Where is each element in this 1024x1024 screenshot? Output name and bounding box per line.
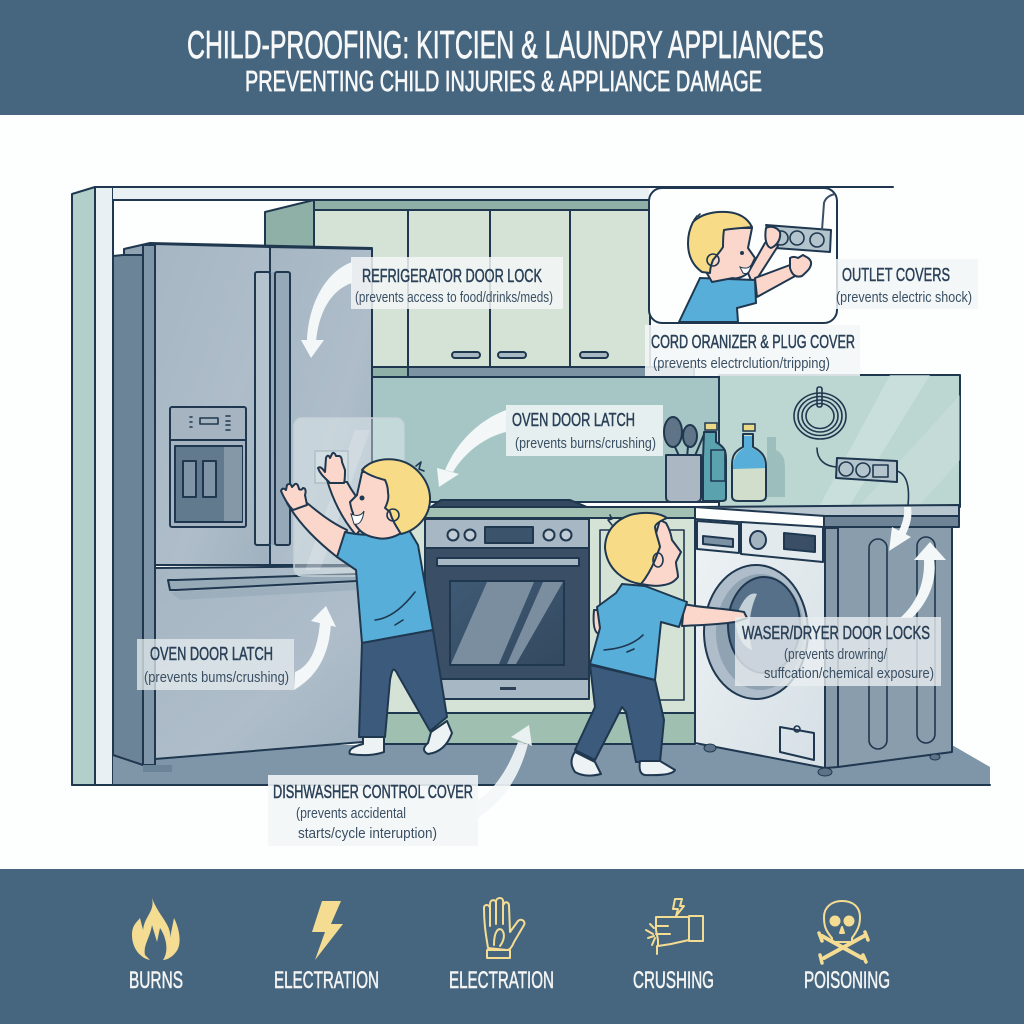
clear door lock panel [294,418,404,576]
utensils and bottles [664,417,785,502]
child trousers [359,630,447,737]
label: oven door latch top [506,405,663,456]
label: burns: BURNS [129,967,183,994]
room frame [72,187,893,785]
trousers [575,665,664,762]
head [641,520,681,586]
child two at washer [572,513,747,776]
icon: crushing fist [646,899,703,954]
floor [113,745,990,785]
icon: hand [484,898,524,958]
label: outlet covers: OUTLET COVERS [842,264,950,285]
child socks [350,737,384,755]
inset child [679,212,811,322]
label: cord organizer [645,325,860,376]
label: dishwasher control cover: (prevents accidental [296,806,406,822]
header banner [0,0,1024,115]
arrow: washer up [900,542,946,618]
label: refrigerator door lock [351,257,563,309]
label: oven door latch left: OVEN DOOR LATCH [150,643,273,664]
label: dishwasher control cover: starts/cycle interuption) [298,826,437,842]
child one at refrigerator [281,453,452,755]
label: cord organizer: (prevents electrclution/tripping) [653,356,830,372]
refrigerator [113,243,372,772]
child head [350,472,401,539]
arrow: dishwasher cover [478,725,532,818]
fridge doors [155,244,270,565]
arm [682,604,747,626]
label: dishwasher control cover: DISHWASHER CONTROL COVER [273,781,473,802]
label: electration: ELECTRATION [274,967,379,994]
icon: flame [132,898,180,960]
oven [425,519,589,699]
subtitle: PREVENTING CHILD INJURIES & APPLIANCE DAMAGE [245,66,762,98]
label: washer dryer door locks: (prevents drowring/ [784,647,888,663]
base cabinets and counter [366,500,695,744]
label: washer dryer door locks [735,617,941,686]
label: poisoning: POISONING [804,967,890,994]
backsplash [372,375,960,507]
label: electration 2: ELECTRATION [449,967,554,994]
icon: lightning bolt [312,901,343,960]
washing machine [695,505,959,776]
label: refrigerator door lock: REFRIGERATOR DOOR LOCK [362,265,542,286]
water dispenser [170,407,246,527]
upper cabinets [265,200,694,386]
label: oven door latch left: (prevents bums/crushing) [144,670,289,686]
footer hazard bar [0,869,1024,1024]
freezer drawer [155,566,372,759]
kitchen scene [72,187,990,846]
arrow: washer down [889,507,911,551]
wall outlet [766,194,835,252]
label: outlet covers [836,259,978,309]
arrow: oven latch top [437,410,506,487]
label: washer dryer door locks: WASER/DRYER DOOR LOCKS [742,622,930,643]
washer door [704,565,808,699]
label: outlet covers: (prevents electric shock) [836,290,972,306]
child arms [327,480,372,535]
label: oven door latch top: OVEN DOOR LATCH [512,409,635,430]
wall cord and power strip [794,387,909,505]
socks [572,752,601,776]
shirt [590,584,687,680]
inset panel: outlet [649,188,837,323]
label: refrigerator door lock: (prevents access to food/drinks/meds) [355,290,553,306]
icon: skull and crossbones [819,901,868,963]
label: washer dryer door locks: suffcation/chemical exposure) [764,666,934,682]
label: oven door latch top: (prevents burns/crushing) [515,436,656,452]
label: crushing: CRUSHING [633,967,714,994]
label: dishwasher control cover [268,775,478,846]
child shirt [337,520,433,643]
fridge handles [254,272,290,545]
arrow: refrigerator lock [301,262,352,358]
arrow: oven latch left [294,606,336,690]
label: cord organizer: CORD ORANIZER & PLUG COVER [651,331,855,352]
label: oven door latch left [137,639,294,690]
